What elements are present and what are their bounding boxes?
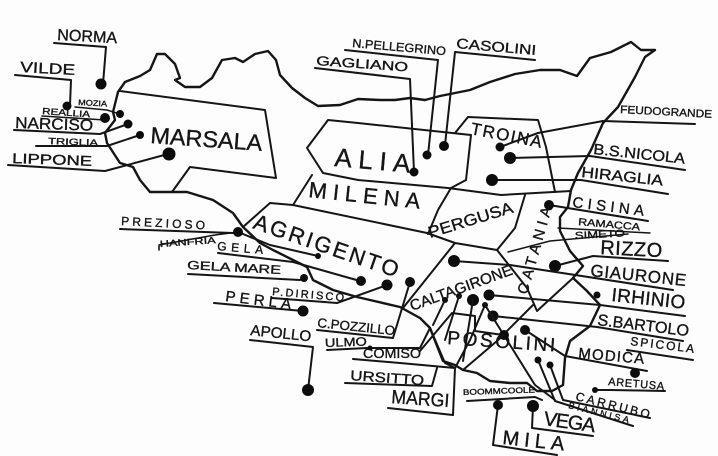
region: Alia bbox=[307, 120, 571, 195]
label: Modica: MODICA bbox=[578, 345, 645, 368]
label: Gela Mare: GELA MARE bbox=[187, 258, 281, 277]
label: Norma: NORMA bbox=[57, 27, 118, 47]
label: Narciso bbox=[14, 115, 132, 135]
label: Norma bbox=[54, 27, 118, 90]
well dots and leader lines in Caltagirone bbox=[433, 293, 555, 400]
label: Gela Mare bbox=[187, 258, 308, 282]
heading: Alia: ALIA bbox=[333, 142, 412, 179]
label: Comiso: COMISO bbox=[363, 345, 421, 361]
heading: Agrigento: AGRIGENTO bbox=[250, 209, 402, 282]
region: Marsala bbox=[120, 91, 276, 192]
heading: Catania: CATANIA bbox=[515, 205, 556, 296]
label: S. Bartolo bbox=[488, 310, 690, 341]
label: Gela: GELA bbox=[217, 239, 264, 257]
region: Posolini bbox=[400, 305, 485, 415]
label: Ursitto bbox=[345, 367, 437, 388]
label: Gagliano bbox=[315, 53, 418, 176]
label: Ursitto: URSITTO bbox=[350, 367, 425, 388]
label: Aretusa: ARETUSA bbox=[608, 376, 665, 393]
label: Casolini bbox=[439, 35, 537, 151]
label: Triglia bbox=[36, 131, 144, 148]
label: Biannisa bbox=[534, 356, 633, 426]
heading: Marsala: MARSALA bbox=[150, 122, 264, 156]
label: Hiraglia bbox=[486, 164, 668, 194]
label: Boom contrada bbox=[463, 385, 542, 401]
label: Narciso: NARCISO bbox=[15, 115, 93, 135]
label: Reallia: REALLIA bbox=[42, 106, 90, 119]
label: Rizzo bbox=[549, 237, 668, 272]
region: Milena bbox=[293, 175, 497, 250]
label: Hanfria bbox=[159, 232, 238, 250]
heading: Milena: MILENA bbox=[307, 177, 422, 214]
label: Hanfria: HANFRIA bbox=[159, 235, 216, 249]
coastline of Sicily bbox=[105, 42, 655, 391]
label: Casolini: CASOLINI bbox=[456, 35, 537, 58]
label: Irhinio bbox=[484, 285, 686, 316]
label: S. Bartolo: S.BARTOLO bbox=[597, 312, 690, 340]
label: Vilde: VILDE bbox=[20, 59, 76, 79]
label: N. Pellegrino bbox=[345, 36, 447, 160]
heading: Pergusa: PERGUSA bbox=[426, 200, 516, 242]
label: Gela bbox=[217, 239, 366, 286]
province boundaries bbox=[120, 91, 573, 415]
label: B.S. Nicola bbox=[504, 141, 686, 170]
region: Pergusa bbox=[428, 180, 525, 250]
label: Margi: MARGI bbox=[391, 387, 450, 412]
label: Apollo: APOLLO bbox=[250, 322, 312, 345]
label: Rizzo: RIZZO bbox=[600, 237, 663, 262]
label: Simeto: SIMETO bbox=[575, 228, 625, 242]
label: Lippone bbox=[8, 148, 176, 171]
label: Ramacca: RAMACCA bbox=[578, 217, 641, 233]
label: C. Pozzillo bbox=[317, 277, 415, 338]
label: Vega bbox=[527, 400, 598, 437]
label: Ramacca bbox=[558, 217, 650, 233]
label: Giaurone: GIAURONE bbox=[590, 261, 687, 290]
label: Mozia bbox=[75, 98, 124, 118]
label: Carrubo: CARRUBO bbox=[574, 389, 651, 421]
label: Biannisa: BIANNISA bbox=[568, 400, 630, 425]
heading: Posolini: POSOLINI bbox=[447, 328, 556, 357]
label: Prezioso bbox=[120, 214, 321, 259]
label: Mila bbox=[493, 400, 566, 456]
heading: Caltagirone: CALTAGIRONE bbox=[408, 262, 515, 315]
label: Simeto bbox=[508, 228, 628, 252]
label: Irhinio: IRHINIO bbox=[610, 285, 686, 314]
label: Reallia bbox=[42, 106, 110, 123]
label: Modica bbox=[520, 325, 647, 378]
label: Gagliano: GAGLIANO bbox=[316, 53, 409, 74]
region: Troina bbox=[455, 117, 555, 192]
region: Agrigento bbox=[243, 203, 293, 227]
label: Perla bbox=[214, 288, 308, 316]
label: Giaurone bbox=[448, 255, 687, 290]
label: Cisina: CISINA bbox=[572, 194, 645, 220]
label: Ulmo bbox=[325, 328, 430, 350]
label: C. Pozzillo: C.POZZILLO bbox=[317, 315, 396, 338]
label: Cisina bbox=[544, 194, 648, 221]
label: Vilde bbox=[15, 59, 76, 110]
label: Boom contrada: BOOMMCOOLE bbox=[463, 385, 535, 397]
label: Feudo Grande: FEUDOGRANDE bbox=[620, 104, 712, 121]
label: Lippone: LIPPONE bbox=[12, 150, 92, 169]
region: Caltagirone bbox=[403, 243, 533, 351]
label: P. Dirisco: P.DIRISCO bbox=[272, 286, 345, 304]
label: Ulmo: ULMO bbox=[325, 335, 367, 350]
label: Spicola: SPICOLA bbox=[630, 334, 695, 356]
label: Mozia: MOZIA bbox=[78, 98, 108, 109]
label: B.S. Nicola: B.S.NICOLA bbox=[593, 141, 686, 168]
label: Carrubo bbox=[546, 362, 651, 421]
label: Perla: PERLA bbox=[225, 288, 292, 313]
heading: Troina: TROINA bbox=[469, 119, 544, 152]
region: Catania bbox=[497, 250, 573, 311]
label: Vega: VEGA bbox=[542, 408, 598, 437]
label: N. Pellegrino: N.PELLEGRINO bbox=[352, 36, 447, 58]
label: P. Dirisco bbox=[272, 280, 392, 304]
label: Mila: MILA bbox=[501, 427, 566, 456]
label: Prezioso: PREZIOSO bbox=[121, 214, 205, 232]
label: Apollo bbox=[250, 322, 314, 396]
label: Feudo Grande bbox=[496, 104, 712, 152]
label: Triglia: TRIGLIA bbox=[48, 136, 98, 148]
label: Hiraglia: HIRAGLIA bbox=[581, 164, 664, 190]
